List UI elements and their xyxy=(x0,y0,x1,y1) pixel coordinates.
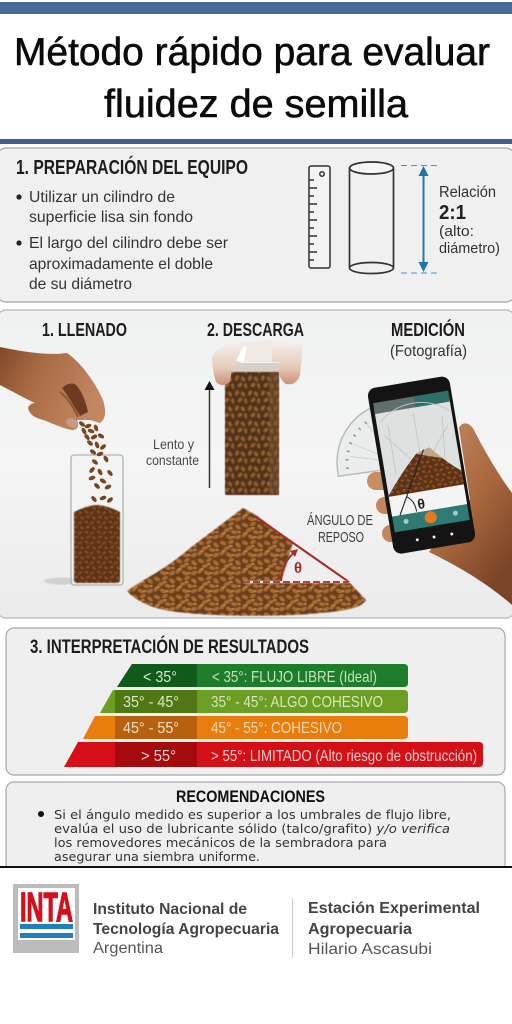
band: limitado: > 55° xyxy=(141,748,176,765)
text: ratio 2:1: (alto: xyxy=(439,223,474,240)
panel: recomendaciones xyxy=(6,782,505,872)
band: algo cohesivo: 35° - 45°: ALGO COHESIVO xyxy=(211,694,383,711)
label: ángulo de reposo xyxy=(307,512,373,546)
text: recomendación: Si el ángulo medido es superior a los umbrales de flujo libre, xyxy=(54,808,451,822)
bullet list: preparación: El largo del cilindro debe ser xyxy=(29,235,229,252)
icon: seed pile with angle xyxy=(127,508,366,616)
bullet list: preparación: superficie lisa sin fondo xyxy=(29,209,193,226)
arrow: cylinder height xyxy=(401,166,439,273)
label: ángulo de reposo: ÁNGULO DE xyxy=(307,512,373,529)
footer background xyxy=(0,866,512,1024)
logo: INTA: INTA xyxy=(20,884,73,930)
icon: full cylinder xyxy=(225,363,279,495)
band: cohesivo: 45° - 55° xyxy=(123,720,179,737)
icon: cylinder xyxy=(350,162,394,274)
icon: ruler xyxy=(309,166,330,268)
icon: protractor left part xyxy=(329,394,457,476)
text: ratio 2:1: diámetro) xyxy=(439,240,500,257)
logo: INTA xyxy=(13,884,79,953)
band: algo cohesivo xyxy=(100,690,408,713)
text: experimental station: Agropecuaria xyxy=(308,921,412,938)
bullet list: preparación xyxy=(16,189,229,293)
icon: smartphone xyxy=(367,375,476,555)
text: institute name: Instituto Nacional de xyxy=(93,901,247,918)
phone screen xyxy=(373,391,470,532)
text: ratio 2:1: 2:1 xyxy=(439,202,466,224)
panel: preparación del equipo xyxy=(0,148,512,302)
text: institute name: Argentina xyxy=(93,940,163,957)
panel: procedimiento xyxy=(0,310,512,618)
subheading: fotografía: (Fotografía) xyxy=(390,343,467,360)
text: lento y constante xyxy=(146,436,199,468)
text: ratio 2:1 xyxy=(439,184,500,257)
band: algo cohesivo: 35° - 45° xyxy=(123,694,179,711)
text: lento y constante: constante xyxy=(146,452,199,468)
text: experimental station xyxy=(308,900,480,958)
heading: preparación: 1. PREPARACIÓN DEL EQUIPO xyxy=(16,155,248,179)
text: recomendación: asegurar una siembra uniforme. xyxy=(54,850,260,864)
band: limitado xyxy=(64,742,483,767)
bullet list: preparación: de su diámetro xyxy=(29,276,132,293)
text: lento y constante: Lento y xyxy=(153,436,194,452)
heading: interpretación: 3. INTERPRETACIÓN DE RESULTADOS xyxy=(30,636,309,658)
text: institute name xyxy=(93,901,279,957)
band: flujo libre: < 35° xyxy=(143,669,177,686)
text: institute name: Tecnología Agropecuaria xyxy=(93,921,279,938)
label: ángulo de reposo: REPOSO xyxy=(318,529,364,546)
phone screen: θ xyxy=(416,495,426,512)
text: ratio 2:1: Relación xyxy=(439,184,496,201)
icon: seed pile with angle: θ xyxy=(294,560,302,577)
footer top rule xyxy=(0,866,512,868)
text: recomendación: los removedores mecánicos de la sembradora para xyxy=(54,836,387,850)
heading: llenado: 1. LLENADO xyxy=(42,320,127,340)
top header bar xyxy=(0,2,512,14)
title xyxy=(14,31,490,126)
icon: left hand pouring xyxy=(0,347,105,430)
heading: recomendaciones: RECOMENDACIONES xyxy=(176,787,325,806)
heading: descarga: 2. DESCARGA xyxy=(207,320,304,340)
icon: hand holding phone xyxy=(367,423,512,605)
band: flujo libre xyxy=(117,664,408,687)
title: fluidez de semilla xyxy=(104,83,408,126)
icon: filling cylinder xyxy=(44,455,123,585)
title: Método rápido para evaluar xyxy=(14,31,490,74)
heading: medición: MEDICIÓN xyxy=(391,319,465,340)
panel: interpretación de resultados xyxy=(6,628,505,775)
text: experimental station: Hilario Ascasubi xyxy=(308,941,432,958)
text: recomendación: evalúa el uso de lubricante sólido (talco/grafito) y/o verifica xyxy=(54,822,450,836)
icon: falling seeds xyxy=(78,420,114,504)
icon: hand lifting cylinder xyxy=(212,340,303,385)
band: cohesivo: 45° - 55°: COHESIVO xyxy=(211,720,342,737)
bullet list: preparación: Utilizar un cilindro de xyxy=(29,189,175,206)
text: experimental station: Estación Experimental xyxy=(308,900,480,917)
text: recomendación xyxy=(38,808,451,864)
title divider bar xyxy=(0,139,512,144)
bullet list: preparación: aproximadamente el doble xyxy=(29,256,213,273)
band: flujo libre: < 35°: FLUJO LIBRE (Ideal) xyxy=(212,669,377,686)
arrow: lift upward xyxy=(204,381,214,488)
band: cohesivo xyxy=(83,716,408,739)
